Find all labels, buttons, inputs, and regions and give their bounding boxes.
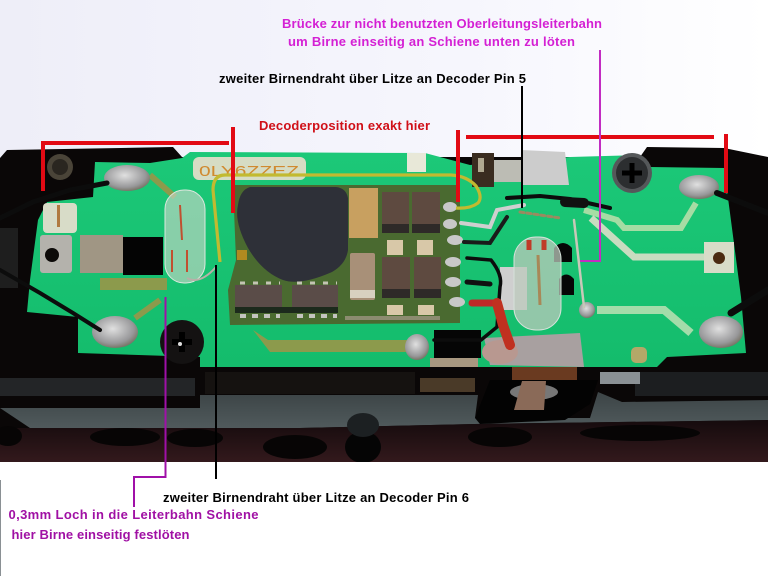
leader line: hole in trace — [134, 297, 166, 507]
integrated circuits — [235, 283, 440, 320]
black supply wires — [0, 183, 768, 330]
left rail contact and opening — [40, 235, 163, 275]
heading: bridge note: um Birne einseitig an Schiene unten zu löten — [288, 34, 575, 49]
red marker: decoder right limit — [456, 130, 460, 202]
screw right — [612, 153, 652, 193]
right bulb — [514, 237, 561, 330]
board traces and printed label: 0LY6ZZEZ — [199, 163, 299, 180]
red bracket: left section — [43, 143, 229, 191]
left bulb — [165, 190, 216, 283]
tantalum capacitor beige — [350, 253, 375, 300]
board traces and printed label — [43, 153, 734, 363]
screw left — [160, 320, 204, 364]
red bracket: right section — [466, 135, 714, 139]
white area below the photo — [0, 462, 768, 576]
leader line: pin 5 — [521, 86, 523, 208]
connection wires right of decoder — [434, 196, 610, 345]
decoder board — [228, 185, 465, 325]
solder points at board corners — [92, 165, 743, 348]
red marker: right end — [724, 134, 728, 193]
decoder pins — [443, 202, 465, 307]
lower chassis gray side — [0, 392, 768, 428]
red marker: decoder left limit — [231, 127, 235, 213]
locomotive chassis — [0, 147, 768, 435]
label: hole note — [8, 507, 258, 542]
label: hole note: 0,3mm Loch in die Leiterbahn Schiene — [8, 507, 258, 522]
label: decoder position: Decoderposition exakt hier — [259, 118, 430, 133]
yellow bridge wire — [213, 175, 480, 262]
tantalum capacitor orange — [349, 188, 378, 238]
printed circuit board — [27, 152, 746, 367]
leader line: bridge — [580, 50, 600, 261]
heading: bridge note: Brücke zur nicht benutzten Oberleitungsleiterbahn — [282, 16, 602, 31]
black bracket with metal tab — [475, 367, 598, 424]
heading: bridge note — [282, 16, 602, 49]
brown chip components — [382, 192, 441, 298]
right side metal contacts — [405, 150, 584, 367]
potting blob — [237, 187, 348, 282]
leader line: pin 6 — [215, 265, 217, 479]
label: pin 5: zweiter Birnendraht über Litze an Decoder Pin 5 — [219, 71, 526, 86]
label: pin 6: zweiter Birnendraht über Litze an Decoder Pin 6 — [163, 490, 469, 505]
solder pads on decoder — [237, 240, 434, 315]
label: hole note: hier Birne einseitig festlöten — [12, 527, 190, 542]
underside with wheels — [0, 413, 768, 463]
